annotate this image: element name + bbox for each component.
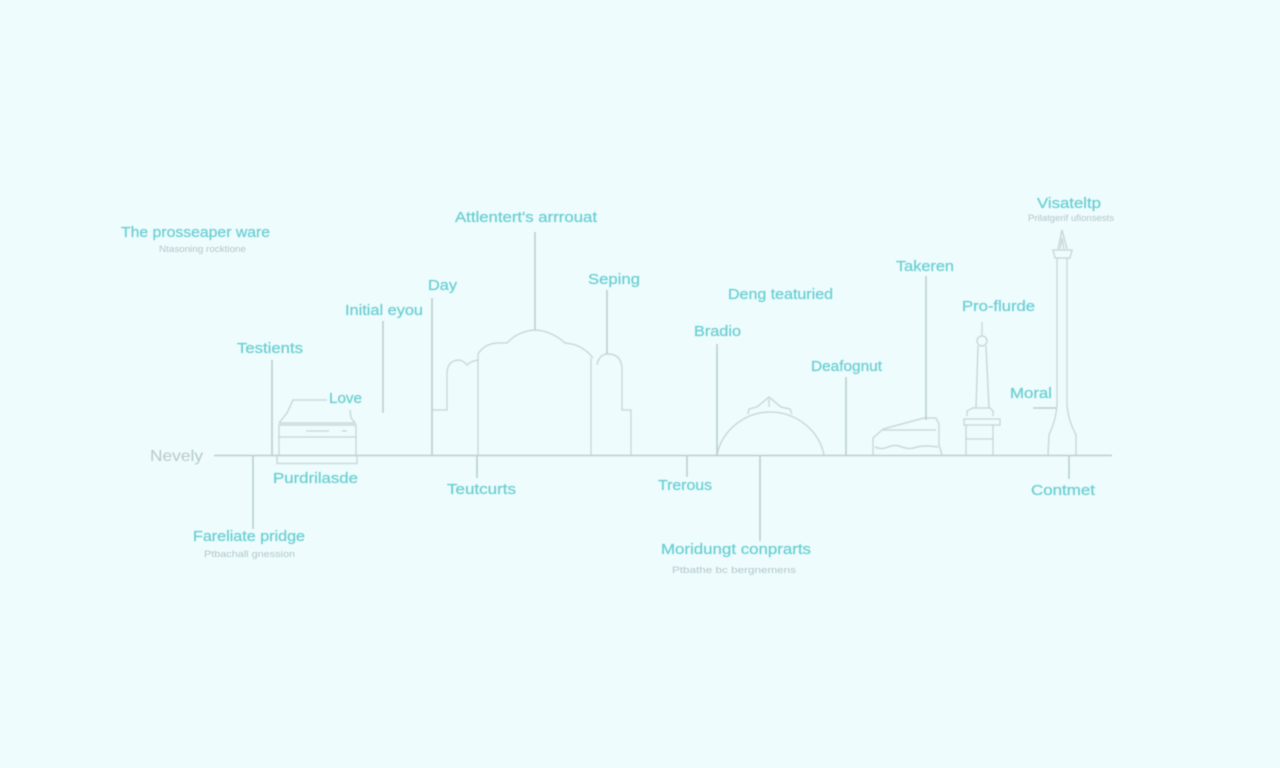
label: Day: Day: [428, 278, 458, 294]
icon: domed hall: [432, 330, 631, 455]
label: Deafognut: Deafognut: [811, 359, 882, 375]
label: Deng teaturied: Deng teaturied: [728, 287, 833, 303]
label: Love: Love: [329, 391, 362, 407]
sublabel: Ptbachall gnession: Ptbachall gnession: [204, 549, 295, 560]
icon: tall spire: [1048, 230, 1076, 455]
axis label: Nevely: Nevely: [150, 448, 203, 465]
label: Purdrilasde: Purdrilasde: [273, 471, 358, 487]
label: Fareliate pridge: Fareliate pridge: [193, 529, 305, 545]
label: Moral: Moral: [1010, 386, 1052, 402]
leader lines: [253, 232, 1069, 541]
label: Bradio: Bradio: [694, 324, 741, 340]
label: Teutcurts: Teutcurts: [447, 482, 516, 498]
icon: low dome: [717, 397, 824, 455]
icon: wedge building: [873, 418, 942, 455]
sublabel: Prilatgerif ufionsests: Prilatgerif ufionsests: [1028, 213, 1114, 224]
label: The prosseaper ware: The prosseaper ware: [121, 225, 270, 241]
label: Attlentert's arrrouat: Attlentert's arrrouat: [455, 210, 597, 226]
label: Seping: Seping: [588, 272, 640, 288]
sublabel: Ptbathe bc bergnemens: Ptbathe bc bergnemens: [672, 565, 796, 576]
label: Testients: Testients: [237, 341, 303, 357]
sublabel: Ntasoning rocktione: Ntasoning rocktione: [159, 244, 246, 255]
timeline axis: [214, 454, 1112, 456]
icon: small tower: [964, 322, 1000, 455]
label: Contmet: Contmet: [1031, 483, 1095, 499]
label: Takeren: Takeren: [896, 259, 954, 275]
label: Initial eyou: Initial eyou: [345, 303, 423, 319]
icon: printer building: [277, 400, 357, 464]
label: Pro-flurde: Pro-flurde: [962, 299, 1035, 315]
label: Moridungt conprarts: Moridungt conprarts: [661, 542, 811, 558]
label: Visateltp: Visateltp: [1037, 196, 1101, 212]
label: Trerous: Trerous: [658, 478, 712, 494]
